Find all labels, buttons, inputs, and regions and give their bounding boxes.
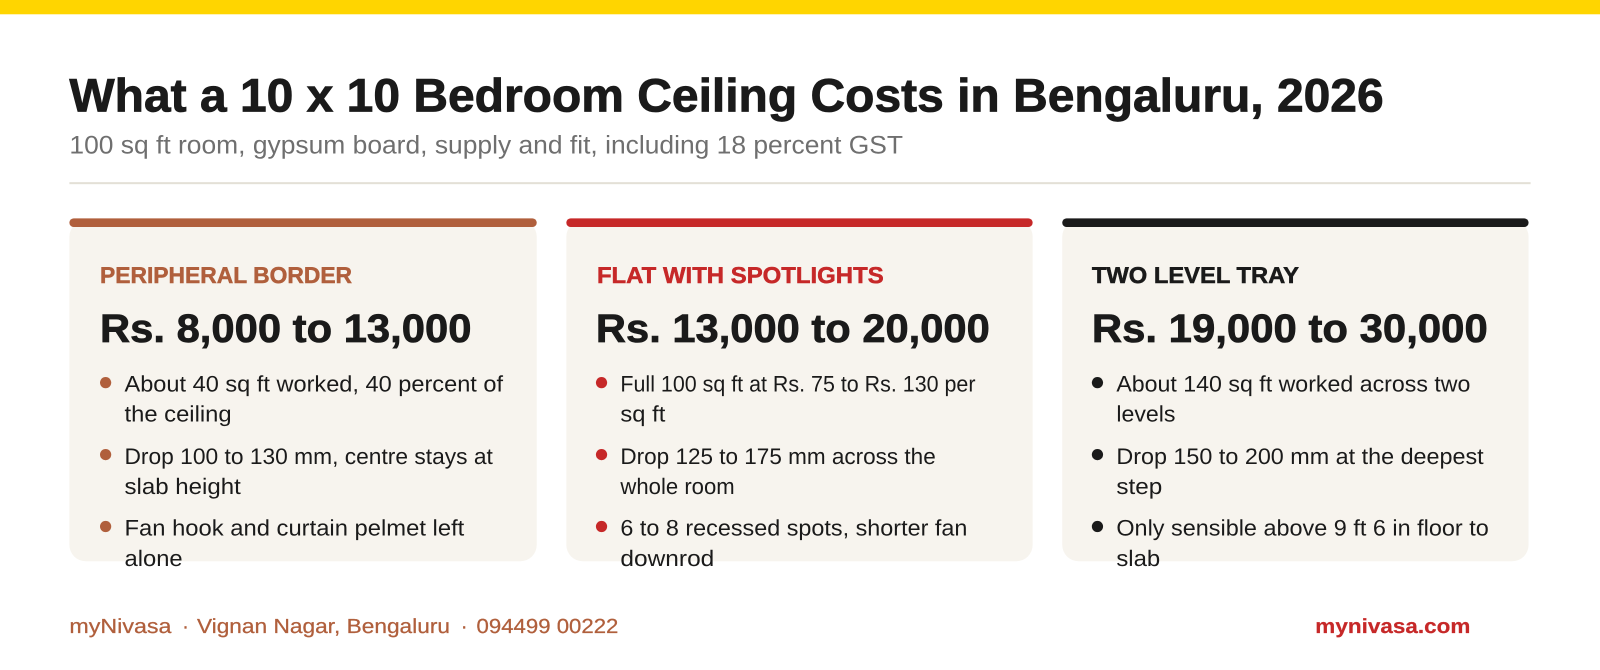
bullet: fan hook: alone (124, 545, 183, 571)
bullet: area worked (1092, 371, 1470, 427)
bullet: area worked: About 40 sq ft worked, 40 percent of (124, 371, 504, 397)
bullet: drop: slab height (124, 473, 241, 499)
bullet: fan hook (100, 515, 464, 571)
price: peripheral border: Rs. 8,000 to 13,000 (100, 307, 471, 351)
panel: peripheral border (69, 218, 537, 571)
bullet: drop: Drop 125 to 175 mm across the (620, 443, 936, 469)
top accent bar (0, 0, 1600, 14)
panel accent bar: flat with spotlights (566, 218, 1033, 227)
bullet: height requirement: slab (1116, 545, 1160, 571)
footer (69, 616, 1470, 638)
footer contact details: · (182, 616, 189, 638)
footer contact details: 094499 00222 (477, 616, 618, 638)
bullet: drop (100, 443, 493, 499)
price: two level tray: Rs. 19,000 to 30,000 (1092, 307, 1488, 351)
footer contact details: · (461, 616, 468, 638)
panel: flat with spotlights (566, 218, 1033, 571)
bullet: spots (596, 515, 967, 571)
bullet: area worked: About 140 sq ft worked across two (1116, 371, 1470, 397)
bullet: area worked: levels (1116, 401, 1176, 427)
panel accent bar: peripheral border (69, 218, 537, 227)
bullet: drop (1092, 443, 1484, 499)
footer contact details (69, 616, 618, 638)
bullet: rate: sq ft (620, 401, 665, 427)
panel accent bar: two level tray (1062, 218, 1529, 227)
bullet: drop: Drop 100 to 130 mm, centre stays at (124, 443, 493, 469)
bullet: area worked: the ceiling (124, 401, 232, 427)
price: flat with spotlights: Rs. 13,000 to 20,000 (596, 307, 990, 351)
bullet: drop: step (1116, 473, 1162, 499)
bullet: fan hook: Fan hook and curtain pelmet left (124, 515, 464, 541)
footer contact details: Vignan Nagar, Bengaluru (197, 616, 450, 638)
panel: two level tray (1062, 218, 1529, 571)
panel heading: two level tray: TWO LEVEL TRAY (1092, 263, 1299, 288)
header (69, 69, 1384, 160)
bullet: height requirement: Only sensible above 9 ft 6 in floor to (1116, 515, 1489, 541)
bullet: drop (596, 443, 936, 499)
bullet: area worked (100, 371, 504, 427)
bullet: spots: 6 to 8 recessed spots, shorter fan (620, 515, 967, 541)
footer website: mynivasa.com (1315, 616, 1470, 638)
panel heading: flat with spotlights: FLAT WITH SPOTLIGHTS (597, 263, 884, 288)
title: What a 10 x 10 Bedroom Ceiling Costs in Bengaluru, 2026 (69, 69, 1384, 122)
bullet: rate (596, 371, 976, 427)
footer contact details: myNivasa (69, 616, 172, 638)
bullet: height requirement (1092, 515, 1489, 571)
panel heading: peripheral border: PERIPHERAL BORDER (100, 263, 352, 288)
bullet: drop: whole room (619, 473, 735, 499)
subtitle: 100 sq ft room, gypsum board, supply and fit, including 18 percent GST (69, 131, 903, 160)
bullet: spots: downrod (620, 545, 714, 571)
bullet: drop: Drop 150 to 200 mm at the deepest (1116, 443, 1484, 469)
bullet: rate: Full 100 sq ft at Rs. 75 to Rs. 130 per (620, 371, 976, 397)
